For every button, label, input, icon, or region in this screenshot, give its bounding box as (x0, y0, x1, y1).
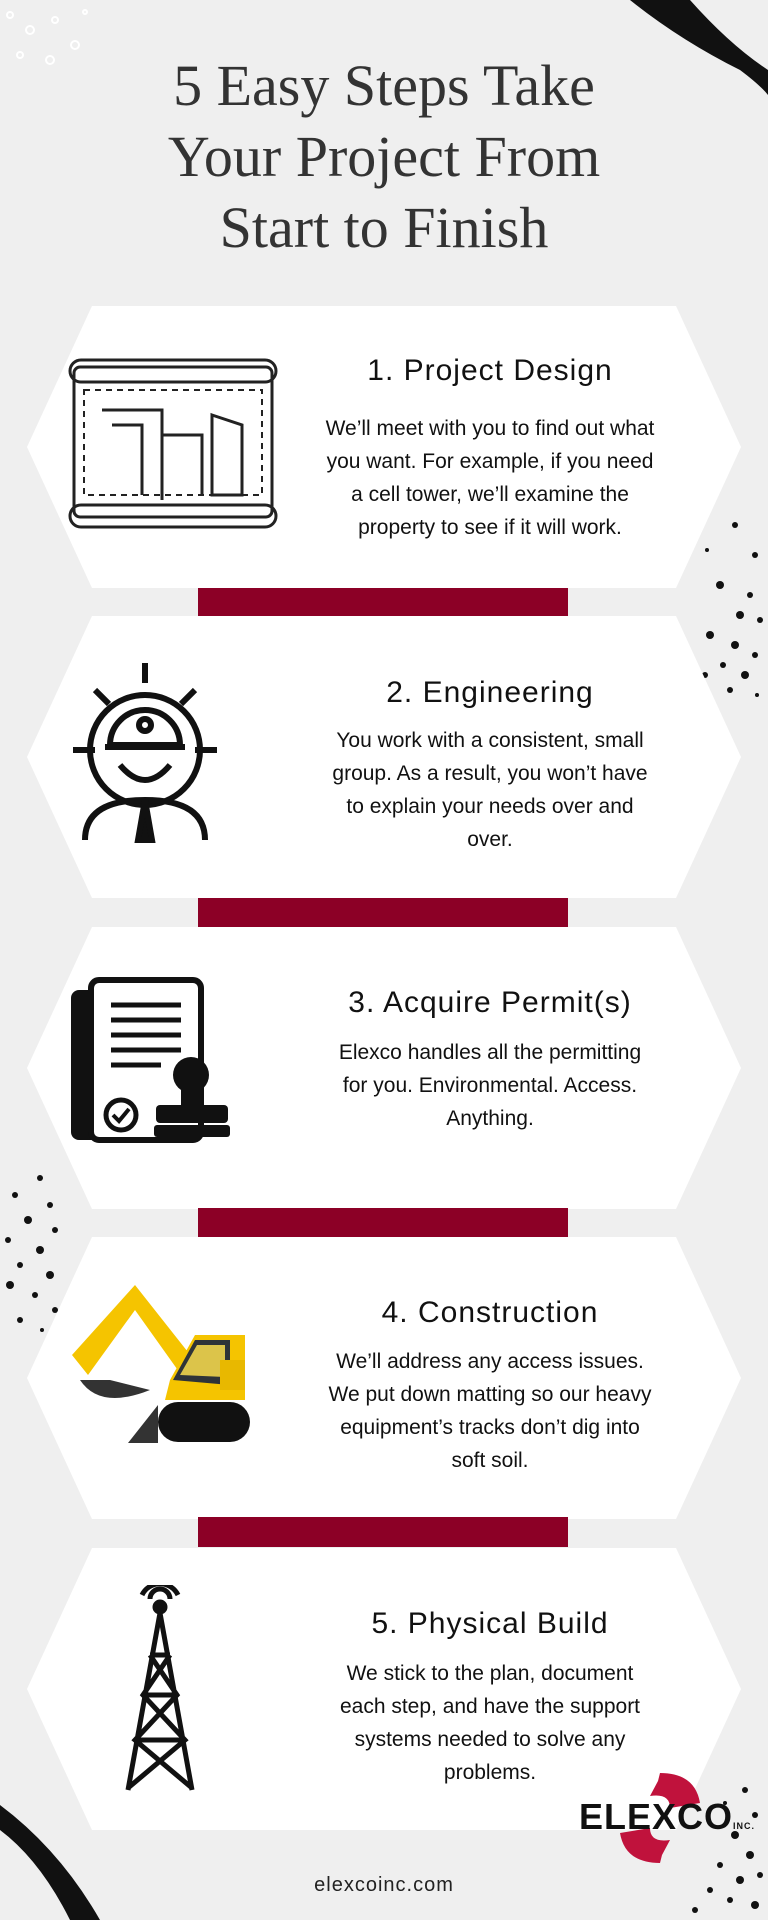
heading: step 5: 5. Physical Build (371, 1607, 609, 1640)
text: step 2: You work with a consistent, small group. As a result, you won’t have to explain your needs over and over. (332, 729, 648, 851)
title: 5 Easy Steps Take (173, 53, 595, 118)
logo: Elexco: ELEXCOINC. (579, 1796, 755, 1837)
panel: step 5 (27, 1548, 741, 1830)
heading: step 1: 1. Project Design (367, 354, 613, 387)
icon: engineer gear (73, 663, 217, 843)
heading: step 2: 2. Engineering (386, 676, 594, 709)
title (168, 53, 600, 260)
text: step 3: Elexco handles all the permitting for you. Environmental. Access. Anything. (339, 1041, 641, 1130)
icon: cell tower (126, 1585, 194, 1790)
decoration: dots bottom right (692, 1787, 763, 1913)
panel: step 2 (27, 616, 741, 898)
decoration: white dots top left (6, 9, 88, 65)
title: Your Project From (168, 124, 600, 189)
footer: url: elexcoinc.com (314, 1874, 454, 1896)
decoration: dots right (702, 522, 763, 697)
panel: step 4 (27, 1237, 741, 1519)
heading: step 3: 3. Acquire Permit(s) (348, 986, 632, 1019)
icon: permit document (71, 977, 230, 1143)
text: step 1: We’ll meet with you to find out what you want. For example, if you need a cell tower, we’ll examine the property to see if it will work. (326, 417, 654, 539)
decoration: brush stroke bottom left (0, 1805, 100, 1920)
panel: step 1 (27, 306, 741, 588)
connector bar 3 (198, 1208, 568, 1238)
connector bar 2 (198, 898, 568, 928)
connector bar 1 (198, 588, 568, 618)
logo: Elexco (579, 1773, 755, 1863)
decoration: dots left (5, 1175, 58, 1332)
panel: step 3 (27, 927, 741, 1209)
text: step 5: We stick to the plan, document each step, and have the support systems needed to solve any problems. (340, 1662, 640, 1784)
heading: step 4: 4. Construction (382, 1296, 598, 1329)
connector bar 4 (198, 1517, 568, 1547)
icon: excavator (72, 1285, 250, 1443)
decoration: brush stroke top right (630, 0, 768, 95)
title: Start to Finish (220, 195, 548, 260)
icon: blueprint scroll (68, 358, 278, 528)
text: step 4: We’ll address any access issues. We put down matting so our heavy equipment’s tracks don’t dig into soft soil. (329, 1350, 651, 1472)
